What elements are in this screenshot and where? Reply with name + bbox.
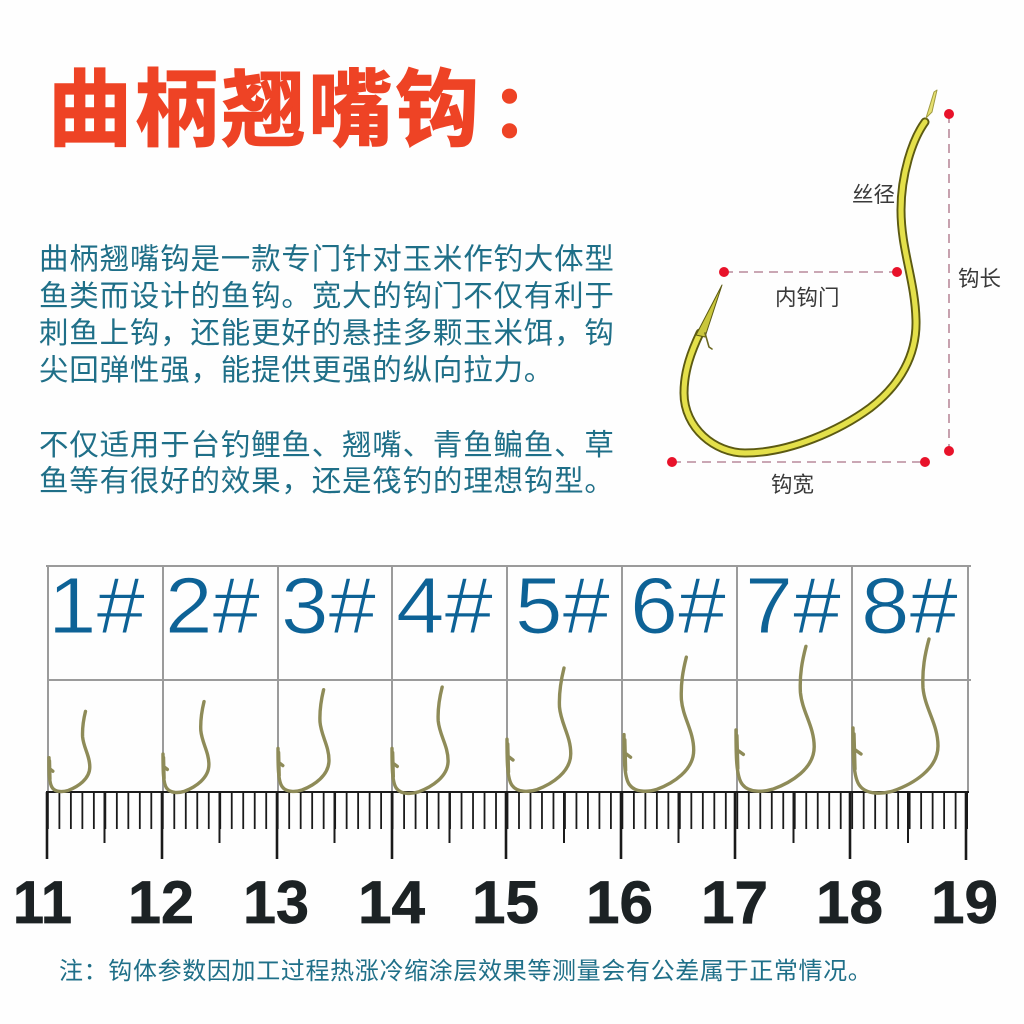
size labels: 1# xyxy=(48,561,146,650)
ruler xyxy=(46,792,969,860)
diagram labels: 丝径 xyxy=(852,183,895,207)
dashed dimension lines xyxy=(672,114,949,462)
ruler numbers: 17 xyxy=(701,869,768,936)
title: 曲柄翘嘴钩 xyxy=(48,63,482,157)
ruler numbers: 14 xyxy=(358,869,426,936)
text block: description: 曲柄翘嘴钩是一款专门针对玉米作钓大体型 xyxy=(39,243,615,276)
ruler numbers: 16 xyxy=(586,869,653,936)
hook 4# xyxy=(392,687,448,793)
ruler numbers: 18 xyxy=(816,869,883,936)
ruler numbers: 11 xyxy=(13,869,72,936)
ruler numbers: 13 xyxy=(243,869,309,936)
ruler numbers: 19 xyxy=(931,869,998,936)
text block: description xyxy=(39,243,615,498)
hook 3# xyxy=(278,690,329,791)
hook 2# xyxy=(163,702,209,792)
text block: description: 鱼等有很好的效果，还是筏钓的理想钩型。 xyxy=(39,465,615,498)
text block: description: 尖回弹性强，能提供更强的纵向拉力。 xyxy=(39,354,554,387)
title: ： xyxy=(492,73,564,153)
size labels: 3# xyxy=(281,561,377,650)
text block: description: 不仅适用于台钓鲤鱼、翘嘴、青鱼鳊鱼、草 xyxy=(39,429,615,462)
size labels: 8# xyxy=(861,561,959,650)
size labels: 7# xyxy=(745,561,842,650)
icon: golden hook xyxy=(684,90,937,453)
text block: description: 刺鱼上钩，还能更好的悬挂多颗玉米饵，钩 xyxy=(39,317,615,350)
ruler numbers: 15 xyxy=(472,869,539,936)
hook 8# xyxy=(853,639,938,793)
footnote: 注：钩体参数因加工过程热涨冷缩涂层效果等测量会有公差属于正常情况。 xyxy=(59,958,872,985)
hook 6# xyxy=(624,657,694,791)
hooks on ruler, sizes 1 to 8 xyxy=(49,639,938,793)
diagram labels xyxy=(771,183,1001,497)
ruler numbers xyxy=(13,869,998,936)
diagram labels: 内钩门 xyxy=(775,286,840,310)
size grid xyxy=(46,566,971,792)
hook anatomy diagram xyxy=(667,90,1001,497)
hook 1# xyxy=(49,711,90,792)
size labels: 6# xyxy=(630,561,727,650)
red measurement dots xyxy=(667,109,954,467)
text block: description: 鱼类而设计的鱼钩。宽大的钩门不仅有利于 xyxy=(39,280,615,313)
diagram labels: 钩长 xyxy=(958,267,1001,291)
size labels: 2# xyxy=(165,561,261,650)
ruler numbers: 12 xyxy=(128,869,194,936)
hook 5# xyxy=(507,668,571,791)
diagram labels: 钩宽 xyxy=(771,473,814,497)
hook 7# xyxy=(736,646,814,791)
size labels: 5# xyxy=(515,561,611,650)
size labels: 4# xyxy=(396,561,494,650)
size labels xyxy=(48,561,959,650)
